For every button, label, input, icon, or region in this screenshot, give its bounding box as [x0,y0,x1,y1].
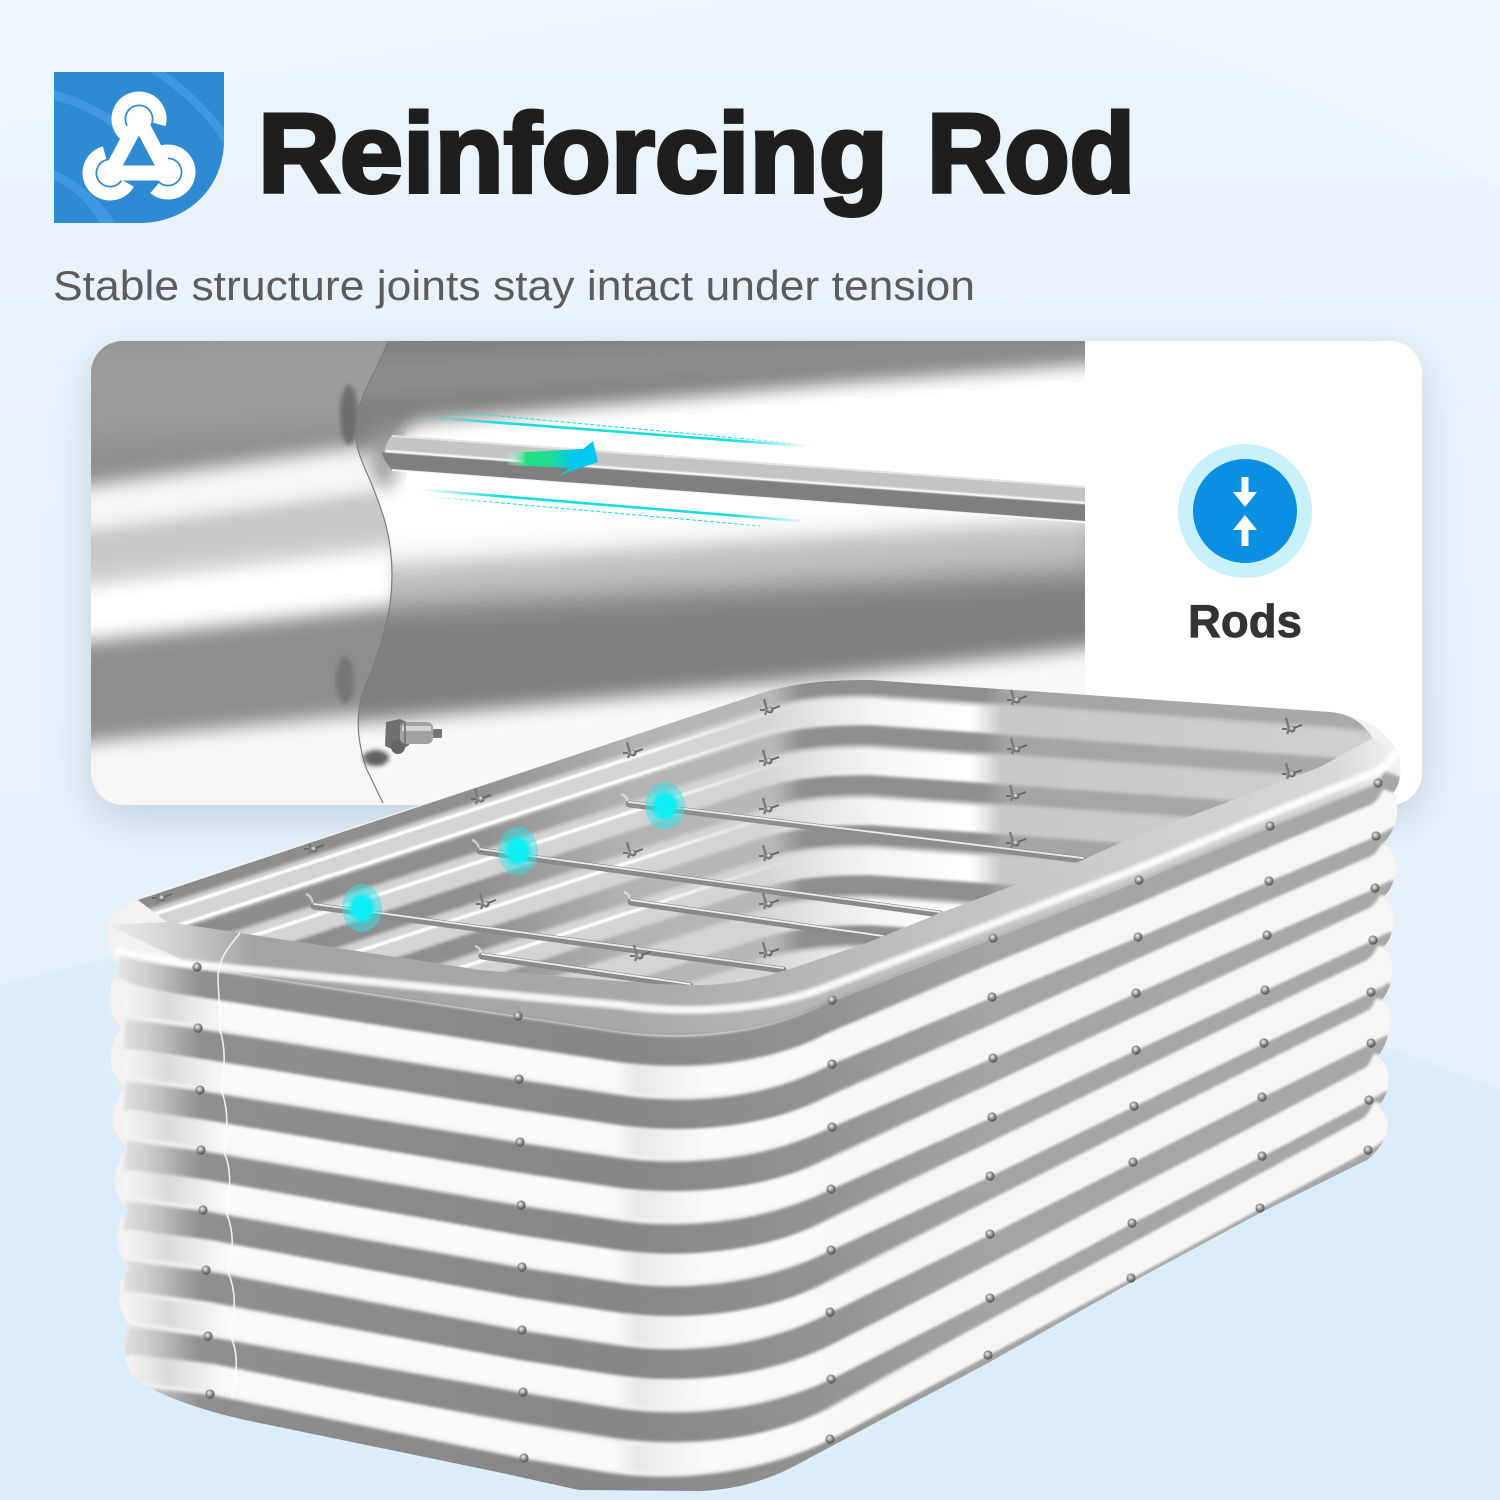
pocket end caps [306,794,631,956]
reinforcing rod [382,435,1085,522]
bolt [363,719,442,766]
arrow on rod [505,441,598,475]
subtitle: Stable structure joints stay intact under tension [53,262,975,309]
corrugated side bands [116,750,1398,1492]
title: Reinforcing [258,91,888,216]
heading icon: webhook badge [54,72,224,223]
bed interior wall [138,680,1373,985]
joint seam [218,933,240,1398]
icon: rods compression [1178,444,1312,578]
bed rim [108,738,1398,1035]
title: Rod [927,91,1135,216]
cyan motion lines [425,410,805,526]
wing nuts [152,689,1302,961]
photo: tube and reinforcing rod [91,341,1085,805]
seam line [356,341,392,803]
rivets [192,778,1383,1463]
left tube section [91,341,392,805]
glow markers on rods [342,782,685,932]
raised garden bed [100,670,1420,1492]
panel: rod closeup card [60,330,1422,830]
inner rods [314,802,1083,986]
right tube section [356,341,1085,805]
label: Rods: Rods [1188,595,1302,647]
rim highlight [116,750,1396,1010]
